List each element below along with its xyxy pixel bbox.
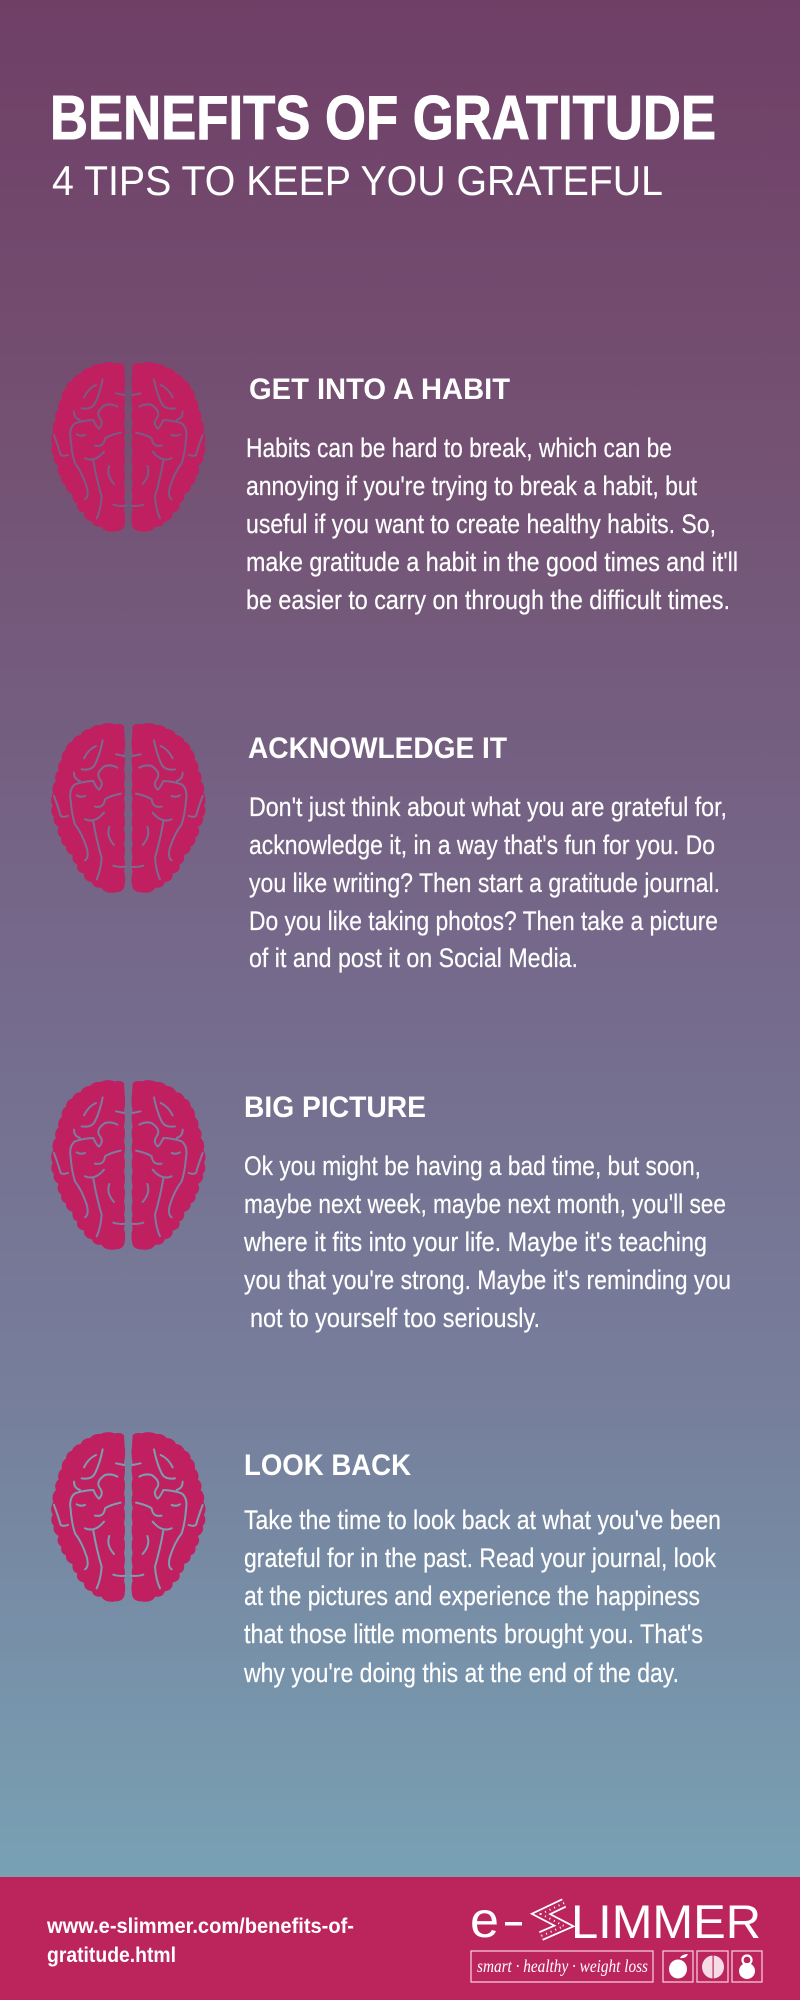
text block: big picture tip: you that you're strong. Maybe it's reminding you <box>244 1265 731 1295</box>
footer url: gratitude.html <box>47 1944 176 1967</box>
icon: small brain <box>697 1951 728 1982</box>
text block: habit tip <box>246 433 738 615</box>
text block: habit tip: be easier to carry on through the difficult times. <box>246 585 730 615</box>
text block: big picture tip <box>243 1151 731 1333</box>
logo: e-slimmer: LIMMER <box>571 1895 761 1948</box>
text block: look back tip: that those little moments brought you. That's <box>244 1619 703 1649</box>
icon: brain 2 <box>51 723 205 893</box>
footer url <box>46 1915 354 1967</box>
text block: look back tip: at the pictures and experience the happiness <box>244 1581 700 1611</box>
text block: habit tip: useful if you want to create healthy habits. So, <box>246 509 716 539</box>
heading: get into a habit: GET INTO A HABIT <box>249 373 510 406</box>
panel: tip 3 big picture <box>51 1080 731 1333</box>
text block: habit tip: Habits can be hard to break, which can be <box>246 433 672 463</box>
heading: look back: LOOK BACK <box>244 1449 411 1482</box>
heading: big picture: BIG PICTURE <box>244 1091 426 1124</box>
text block: big picture tip: not to yourself too seriously. <box>250 1303 540 1333</box>
text block: acknowledge tip: Don't just think about what you are grateful for, <box>249 792 727 822</box>
footer band <box>0 1877 800 2000</box>
panel: tip 1 get into a habit <box>51 362 738 615</box>
logo: e-slimmer: e <box>470 1892 499 1948</box>
text block: big picture tip: Ok you might be having a bad time, but soon, <box>244 1151 701 1181</box>
text block: big picture tip: where it fits into your life. Maybe it's teaching <box>243 1227 707 1257</box>
text block: acknowledge tip: Do you like taking photos? Then take a picture <box>249 906 718 936</box>
footer url: www.e-slimmer.com/benefits-of- <box>46 1915 354 1938</box>
text block: acknowledge tip: of it and post it on Social Media. <box>249 943 578 973</box>
text block: acknowledge tip: you like writing? Then start a gratitude journal. <box>249 868 720 898</box>
icon: brain 1 <box>51 362 205 532</box>
icon: brain 4 <box>51 1432 205 1602</box>
text block: acknowledge tip <box>249 792 727 973</box>
icon: apple <box>663 1951 693 1982</box>
icon: tape measure S <box>541 1903 564 1936</box>
text block: look back tip: grateful for in the past. Read your journal, look <box>244 1543 716 1573</box>
text block: habit tip: annoying if you're trying to break a habit, but <box>246 471 697 501</box>
logo: e-slimmer: smart · healthy · weight loss <box>477 1956 648 1976</box>
text block: look back tip: why you're doing this at the end of the day. <box>243 1658 679 1688</box>
panel: footer <box>0 1877 800 2000</box>
icon: brain 3 <box>51 1080 205 1250</box>
panel: tip 4 look back <box>51 1432 721 1688</box>
tagline box <box>471 1951 653 1982</box>
text block: look back tip: Take the time to look back at what you've been <box>244 1505 721 1535</box>
text block: habit tip: make gratitude a habit in the good times and it'll <box>246 547 738 577</box>
title block <box>50 84 716 204</box>
panel: tip 2 acknowledge it <box>51 723 727 973</box>
icon: kettlebell <box>732 1951 762 1982</box>
text block: look back tip <box>243 1505 721 1688</box>
logo: e-slimmer <box>470 1892 762 1982</box>
text block: acknowledge tip: acknowledge it, in a way that's fun for you. Do <box>249 830 715 860</box>
heading: acknowledge it: ACKNOWLEDGE IT <box>248 732 507 765</box>
subtitle: 4 TIPS TO KEEP YOU GRATEFUL <box>52 157 663 204</box>
